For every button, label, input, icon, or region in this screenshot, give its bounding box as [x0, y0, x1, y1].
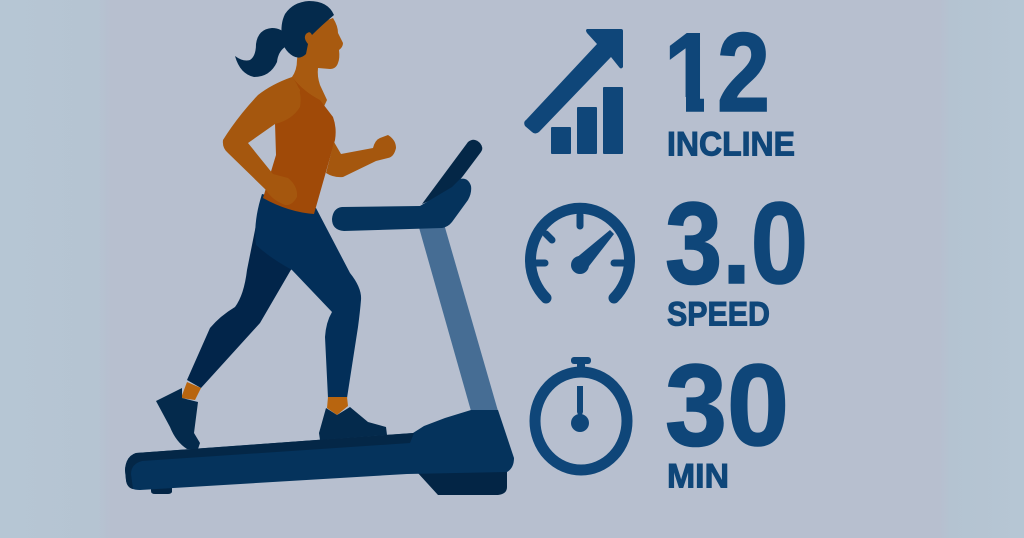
value: 30: 30: [665, 340, 789, 470]
hair: [281, 1, 334, 58]
value: 12: 12: [664, 10, 770, 135]
icon: speedometer: [530, 208, 630, 298]
far sock: [181, 382, 201, 400]
label: speed: SPEED: [667, 296, 770, 334]
right arm: [223, 77, 301, 205]
treadmill console: [422, 140, 482, 204]
treadmill post: [418, 224, 498, 411]
icon: rising arrow with bars: [524, 29, 623, 154]
left arm: [326, 135, 396, 177]
near sock: [327, 397, 348, 415]
runner: [156, 1, 396, 449]
far leg: [187, 225, 292, 388]
label: min: MIN: [667, 458, 729, 496]
treadmill: [125, 140, 514, 495]
metric: time: [535, 340, 789, 496]
near shoe: [319, 407, 387, 440]
value: 3.0: 3.0: [665, 178, 808, 308]
near leg: [255, 194, 361, 398]
icon: stopwatch: [535, 357, 627, 470]
label: incline: INCLINE: [667, 126, 795, 164]
tank top: [263, 77, 336, 214]
metric: speed: [530, 178, 808, 334]
treadmill deck: [125, 410, 514, 490]
treadmill belt: [125, 433, 414, 489]
far shoe: [156, 388, 200, 449]
treadmill foot: [151, 488, 172, 494]
treadmill handlebar: [332, 179, 471, 231]
treadmill motor base: [417, 470, 507, 495]
ponytail: [235, 28, 287, 77]
head and neck: [290, 18, 343, 115]
metric: incline: [524, 10, 795, 164]
